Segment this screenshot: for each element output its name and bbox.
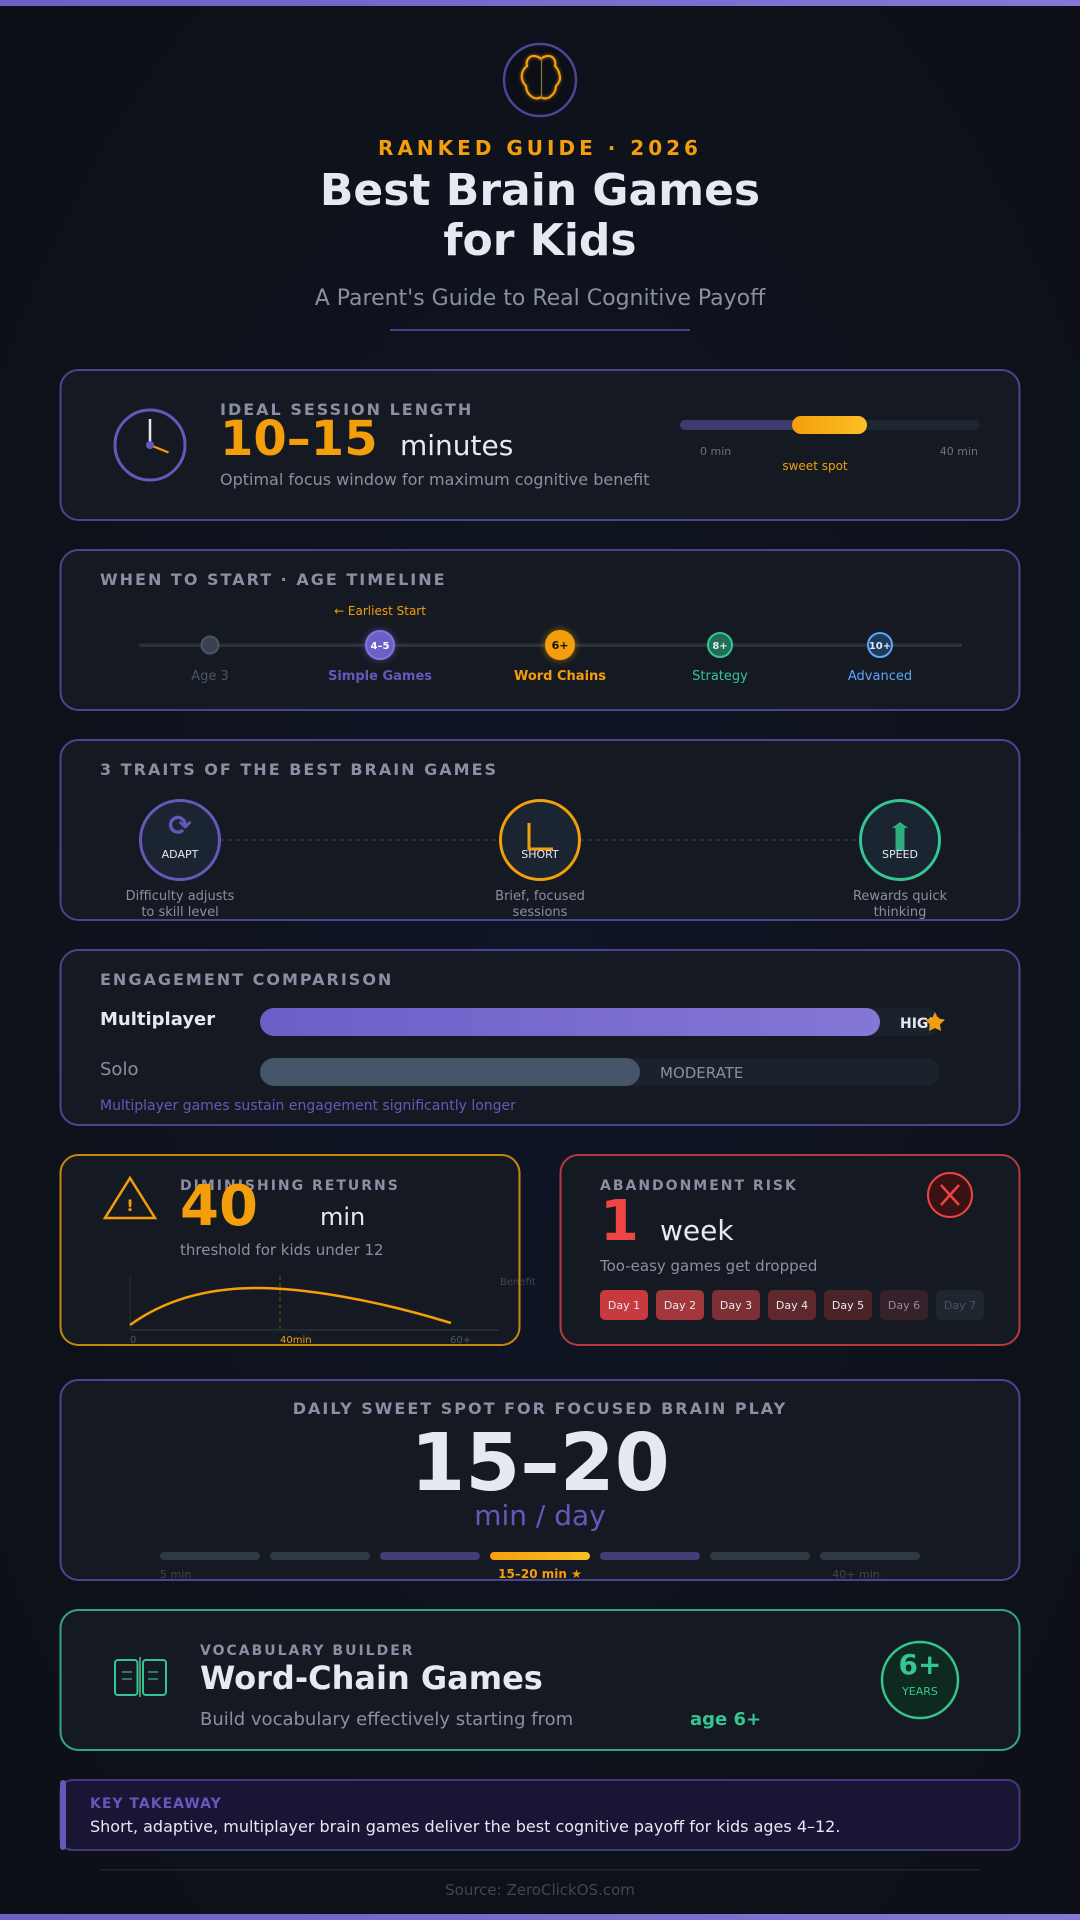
heading: 3 TRAITS OF THE BEST BRAIN GAMES — [100, 760, 498, 779]
title line 2: for Kids — [443, 215, 637, 266]
label: KEY TAKEAWAY — [90, 1796, 222, 1812]
trait: short: SHORT — [521, 848, 559, 861]
trait: adapt: ⟳ — [168, 809, 192, 842]
node: 4-5 — [328, 630, 432, 684]
unit: min — [320, 1203, 365, 1231]
day chips: Day 2 — [664, 1299, 696, 1312]
chart: benefit curve — [130, 1276, 536, 1346]
chart: benefit curve: 40min — [280, 1335, 312, 1346]
segmented scale: 5 min — [160, 1568, 191, 1581]
title: Best Brain Games — [320, 165, 760, 216]
day chips: Day 6 — [888, 1299, 920, 1312]
description: threshold for kids under 12 — [180, 1241, 384, 1259]
range bar: 40 min — [940, 445, 978, 458]
unit: min / day — [474, 1499, 606, 1532]
badge: 6+ years: 6+ — [899, 1648, 941, 1681]
heading: WHEN TO START · AGE TIMELINE — [100, 570, 447, 589]
day chips: Day 5 — [832, 1299, 864, 1312]
trait: speed — [853, 800, 948, 920]
label: IDEAL SESSION LENGTH — [220, 400, 473, 419]
node: age 3: Age 3 — [191, 669, 229, 684]
day chips — [600, 1290, 984, 1320]
label: VOCABULARY BUILDER — [200, 1643, 415, 1659]
trait: speed: thinking — [874, 905, 926, 920]
day chips: Day 4 — [776, 1299, 808, 1312]
label: ABANDONMENT RISK — [600, 1178, 798, 1194]
statement: Short, adaptive, multiplayer brain games deliver the best cognitive payoff for kids ages 4–12. — [90, 1817, 840, 1836]
icon: brain — [504, 44, 576, 116]
node: 10+: Advanced — [848, 669, 912, 684]
node: age 3 — [191, 636, 229, 684]
chart: benefit curve: Benefit — [500, 1277, 536, 1288]
bar: multiplayer: Multiplayer — [100, 1009, 215, 1030]
trait: short: sessions — [513, 905, 568, 920]
panel: age timeline — [60, 550, 1020, 710]
node: 6+ — [514, 630, 606, 684]
node: 8+ — [692, 633, 748, 684]
node: 8+: Strategy — [692, 669, 748, 684]
label: DIMINISHING RETURNS — [180, 1178, 400, 1194]
trait: adapt — [126, 800, 235, 920]
icon: warning — [105, 1178, 155, 1218]
trait: speed: SPEED — [882, 848, 918, 861]
trait: adapt: Difficulty adjusts — [126, 889, 235, 904]
segmented scale: 40+ min — [832, 1568, 880, 1581]
heading: DAILY SWEET SPOT FOR FOCUSED BRAIN PLAY — [293, 1399, 787, 1418]
value: 10–15 — [220, 411, 378, 467]
bar: solo: Solo — [100, 1059, 138, 1080]
trait: adapt: ADAPT — [162, 848, 199, 861]
bottom accent bar — [0, 1914, 1080, 1920]
chart: benefit curve: 60+ — [450, 1335, 471, 1346]
description: Too-easy games get dropped — [599, 1257, 817, 1275]
source: Source: ZeroClickOS.com — [445, 1881, 635, 1899]
value: 40 — [180, 1174, 258, 1239]
badge: 6+ years: YEARS — [901, 1685, 938, 1698]
badge: 6+ years — [882, 1642, 958, 1718]
trait: short: Brief, focused — [495, 889, 585, 904]
day chips: Day 1 — [608, 1299, 640, 1312]
header — [315, 44, 766, 331]
panel: engagement comparison — [60, 950, 1020, 1125]
value: 15–20 — [410, 1417, 670, 1509]
panel: word-chain games — [60, 1610, 1020, 1750]
trait: short — [495, 800, 585, 920]
heading: ENGAGEMENT COMPARISON — [100, 970, 393, 989]
node: 10+ — [848, 633, 912, 684]
icon: book — [115, 1657, 166, 1697]
day chips: Day 3 — [720, 1299, 752, 1312]
callout: ← Earliest Start — [334, 604, 426, 618]
eyebrow: RANKED GUIDE · 2026 — [378, 136, 702, 160]
range bar: sweet spot — [782, 459, 848, 473]
icon: warning: ! — [126, 1196, 134, 1215]
top accent bar — [0, 0, 1080, 6]
range bar: 0 min — [700, 445, 731, 458]
icon: clock — [115, 410, 185, 480]
note: Multiplayer games sustain engagement significantly longer — [100, 1098, 516, 1114]
panel: daily sweet spot — [60, 1380, 1020, 1581]
panel: three traits — [60, 740, 1020, 920]
chart: benefit curve: 0 — [130, 1335, 136, 1346]
value: 1 — [600, 1189, 639, 1254]
node: 10+: 10+ — [869, 641, 891, 652]
icon: x mark — [928, 1173, 972, 1217]
bar: solo — [100, 1058, 940, 1086]
unit: minutes — [400, 429, 513, 462]
panel: abandonment risk — [560, 1155, 1020, 1345]
node: 6+: 6+ — [552, 639, 568, 652]
bar: multiplayer: HIGH — [900, 1016, 940, 1032]
unit: week — [660, 1214, 734, 1247]
headline: Word-Chain Games — [200, 1659, 543, 1697]
highlight: age 6+ — [690, 1709, 761, 1730]
bar: solo: MODERATE — [660, 1064, 743, 1082]
segmented scale — [160, 1552, 920, 1581]
panel: diminishing returns — [60, 1155, 536, 1346]
node: 6+: Word Chains — [514, 669, 606, 684]
range bar — [680, 416, 980, 473]
node: 8+: 8+ — [712, 641, 728, 652]
subtitle: A Parent's Guide to Real Cognitive Payoff — [315, 286, 766, 311]
trait: adapt: to skill level — [141, 905, 219, 920]
description: Optimal focus window for maximum cognitive benefit — [220, 470, 650, 489]
panel: ideal session length — [60, 370, 1020, 520]
segmented scale: 15–20 min ★ — [498, 1567, 582, 1581]
trait: speed: Rewards quick — [853, 889, 948, 904]
node: 4-5: Simple Games — [328, 669, 432, 684]
node: 4-5: 4–5 — [371, 641, 389, 652]
bar: multiplayer — [100, 1008, 945, 1036]
description: Build vocabulary effectively starting from — [200, 1709, 573, 1730]
panel: key takeaway — [60, 1780, 1020, 1850]
day chips: Day 7 — [944, 1299, 976, 1312]
